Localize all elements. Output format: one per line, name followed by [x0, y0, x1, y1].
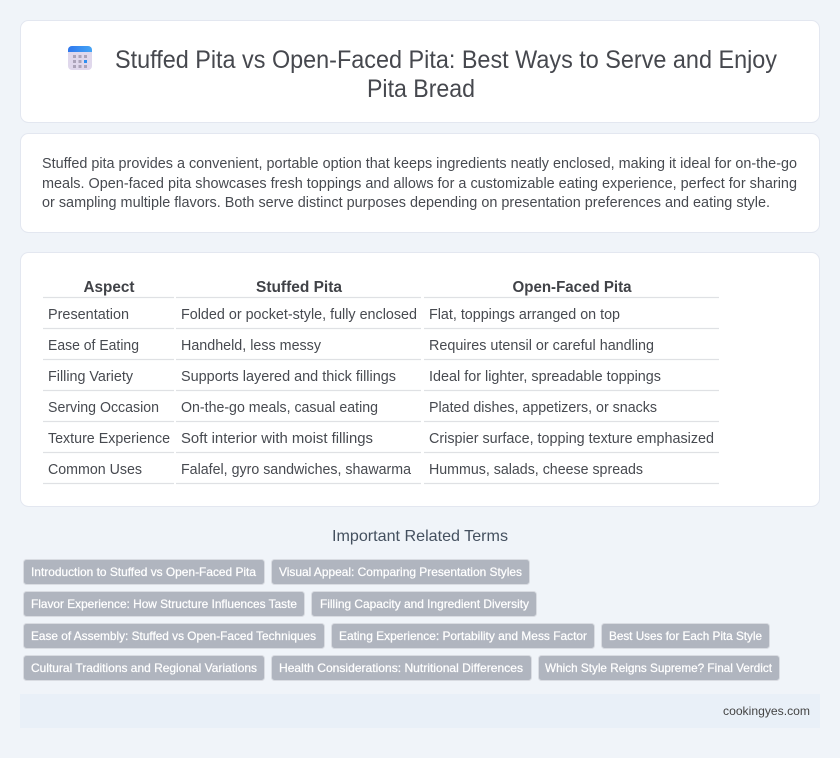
related term tags: Ease of Assembly: Stuffed vs Open-Faced Techniques — [31, 629, 316, 643]
table header: Stuffed Pita — [256, 279, 342, 296]
panel: intro text: or sampling multiple flavors. Both serve distinct purposes depending on presentation preferences and eating style. — [42, 195, 770, 211]
table header — [84, 279, 632, 296]
title: Pita Bread — [367, 75, 475, 103]
panel: intro text — [20, 134, 820, 232]
title — [115, 46, 777, 103]
related term tags — [24, 560, 780, 680]
heading: related terms: Important Related Terms — [332, 528, 508, 545]
panel: intro text: Stuffed pita provides a convenient, portable option that keeps ingredients neatly enclosed, making it ideal for on-the-go — [42, 156, 797, 172]
row: ease of eating — [48, 338, 654, 354]
icon: calendar — [68, 46, 92, 70]
row: presentation: Folded or pocket-style, fully enclosed — [181, 307, 417, 323]
row: ease of eating: Requires utensil or careful handling — [429, 338, 654, 354]
row: common uses: Common Uses — [48, 462, 142, 478]
row: presentation — [48, 307, 620, 323]
row: serving occasion: On-the-go meals, casual eating — [181, 400, 378, 416]
table header: Open-Faced Pita — [512, 279, 632, 296]
row: serving occasion: Serving Occasion — [48, 400, 159, 416]
title: Stuffed Pita vs Open-Faced Pita: Best Ways to Serve and Enjoy — [115, 46, 777, 74]
row: filling variety: Ideal for lighter, spreadable toppings — [429, 369, 661, 385]
row: texture experience: Texture Experience — [48, 431, 170, 447]
related term tags: Which Style Reigns Supreme? Final Verdict — [545, 661, 773, 675]
panel: intro text: meals. Open-faced pita showcases fresh toppings and allows for a customizable eating experience, perfect for sharing — [42, 176, 797, 192]
row: filling variety — [48, 369, 661, 385]
footer bar — [20, 694, 820, 728]
related term tags: Introduction to Stuffed vs Open-Faced Pita — [31, 565, 256, 579]
row: common uses — [48, 462, 643, 478]
row: texture experience: Crispier surface, topping texture emphasized — [429, 431, 714, 447]
related term tags: Health Considerations: Nutritional Differences — [279, 661, 523, 675]
row: ease of eating: Ease of Eating — [48, 338, 139, 354]
row: common uses: Hummus, salads, cheese spreads — [429, 462, 643, 478]
related term tags: Visual Appeal: Comparing Presentation Styles — [279, 565, 522, 579]
related term tags: Best Uses for Each Pita Style — [609, 629, 762, 643]
related term tags: Eating Experience: Portability and Mess Factor — [339, 629, 587, 643]
row: ease of eating: Handheld, less messy — [181, 338, 322, 354]
related term tags: Cultural Traditions and Regional Variations — [31, 661, 257, 675]
row: presentation: Presentation — [48, 307, 129, 323]
related term tags: Filling Capacity and Ingredient Diversity — [320, 597, 529, 611]
row: filling variety: Filling Variety — [48, 369, 134, 385]
panel: comparison table — [20, 252, 820, 506]
panel: header — [20, 20, 820, 122]
table header: Aspect — [84, 279, 135, 296]
related term tags: Flavor Experience: How Structure Influences Taste — [31, 597, 297, 611]
footer source: cookingyes.com — [723, 704, 810, 718]
row: texture experience: Soft interior with moist fillings — [181, 431, 373, 447]
row: texture experience — [48, 431, 714, 447]
row: presentation: Flat, toppings arranged on top — [429, 307, 620, 323]
row: serving occasion: Plated dishes, appetizers, or snacks — [429, 400, 657, 416]
row: common uses: Falafel, gyro sandwiches, shawarma — [181, 462, 412, 478]
row: filling variety: Supports layered and thick fillings — [181, 369, 396, 385]
row: serving occasion — [48, 400, 657, 416]
